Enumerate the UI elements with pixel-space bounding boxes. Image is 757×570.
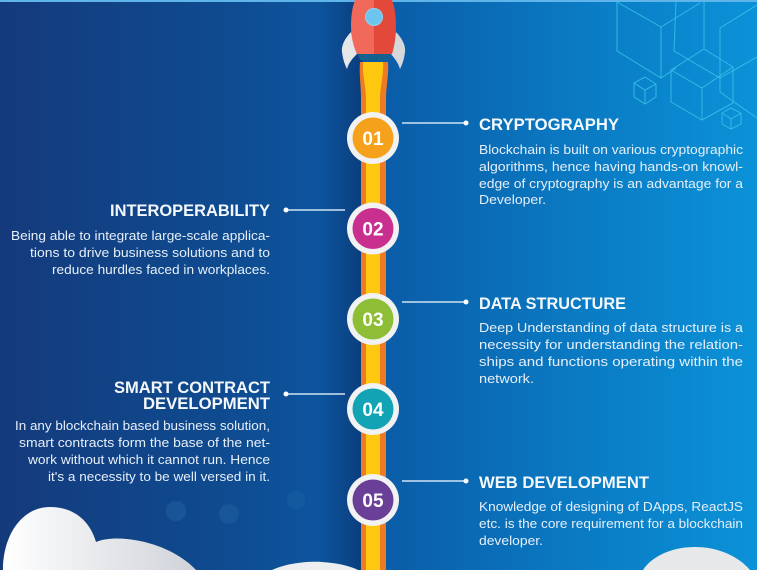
heading: cryptography: CRYPTOGRAPHY (479, 116, 619, 134)
heading: data structure: DATA STRUCTURE (479, 295, 626, 313)
text: data structure: Deep Understanding of data structure is a (479, 320, 744, 335)
heading: interoperability: INTEROPERABILITY (110, 202, 270, 220)
rocket base (357, 52, 392, 60)
step 04 badge (347, 383, 399, 435)
text: cryptography: Developer. (479, 192, 546, 207)
text: smart contract development: In any blockchain based business solution, (15, 418, 270, 433)
text: cryptography (479, 142, 744, 207)
text: smart contract development: smart contracts form the base of the net- (19, 435, 270, 450)
text: cryptography: edge of cryptography is an advantage for a (479, 176, 744, 191)
text: web development: Knowledge of designing of DApps, ReactJS (479, 499, 743, 514)
text: smart contract development: work without which it cannot run. Hence (27, 452, 270, 467)
text: interoperability: reduce hurdles faced in workplaces. (52, 262, 270, 277)
step 01 badge (347, 112, 399, 164)
step 02 badge (347, 202, 399, 254)
text: cryptography: Blockchain is built on various cryptographic (479, 142, 744, 157)
step 05 badge: 05 (362, 491, 384, 512)
text: web development (479, 499, 743, 548)
connector 03 (402, 300, 468, 304)
body left (351, 0, 374, 54)
rocket (342, 0, 405, 69)
text: smart contract development (15, 418, 270, 484)
connector 05 (402, 478, 468, 484)
text: interoperability: Being able to integrate large-scale applica- (11, 228, 270, 243)
text: data structure: network. (479, 371, 534, 386)
text: data structure: ships and functions operating within the (479, 354, 743, 369)
text: web development: developer. (479, 533, 543, 548)
text: interoperability: tions to drive business solutions and to (30, 245, 270, 260)
text: smart contract development: it's a necessity to be well versed in it. (48, 469, 270, 484)
step 03 badge (347, 293, 399, 345)
heading: smart contract development: DEVELOPMENT (143, 395, 270, 413)
step 02 badge: 02 (362, 220, 384, 240)
text: interoperability (11, 228, 270, 277)
fin: left (342, 32, 357, 69)
cloud: bottom centre (272, 562, 358, 570)
step 05 badge (347, 474, 399, 526)
heading: smart contract development (114, 379, 270, 413)
body right (374, 0, 396, 54)
connector 04 (284, 392, 345, 396)
cloud: bottom right (643, 547, 750, 570)
heading: web development: WEB DEVELOPMENT (479, 474, 649, 492)
step 04 badge: 04 (362, 400, 384, 421)
text: cryptography: algorithms, hence having hands-on knowl- (479, 159, 743, 174)
panel: smart contract development (15, 379, 345, 484)
window (366, 8, 382, 26)
panel: data structure (402, 295, 744, 386)
text: web development: etc. is the core requirement for a blockchain (479, 516, 743, 531)
connector 02 (284, 208, 345, 212)
panel: cryptography (402, 116, 744, 207)
text: data structure: necessity for understanding the relation- (479, 337, 743, 352)
step 03 badge: 03 (362, 310, 384, 331)
step 01 badge: 01 (362, 129, 384, 150)
panel: web development (402, 474, 743, 548)
text: data structure (479, 320, 744, 386)
panel: interoperability (11, 202, 345, 277)
rocket trail (360, 62, 388, 570)
heading: smart contract development: SMART CONTRACT (114, 379, 270, 397)
cloud: bottom left (3, 507, 196, 570)
fin: right (391, 32, 405, 69)
decorative cube wireframes (617, 2, 757, 129)
connector 01 (402, 120, 468, 126)
